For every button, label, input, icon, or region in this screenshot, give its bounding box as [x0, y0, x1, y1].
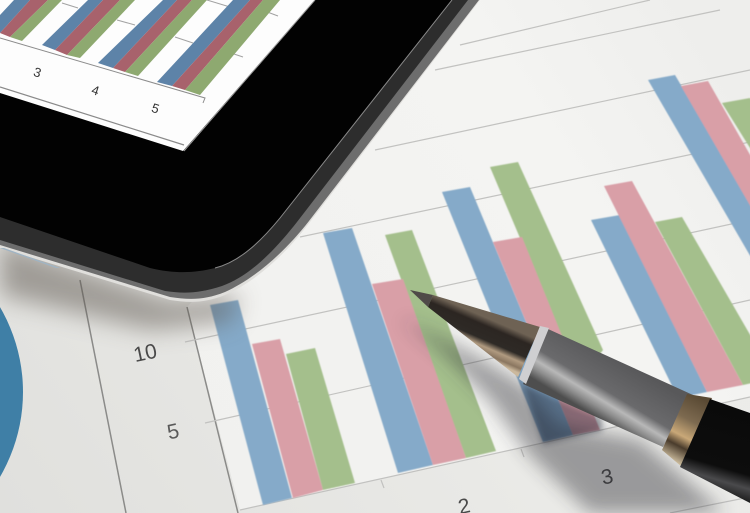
screen bars group 2	[0, 0, 62, 41]
bar group 2	[323, 228, 496, 473]
screen bars group 3	[42, 0, 135, 58]
pen silver collar	[519, 326, 549, 384]
screen label: 3: 3	[32, 64, 43, 81]
pen tip	[410, 290, 433, 307]
chart sheet	[0, 0, 315, 151]
pen contact shadow on bars	[523, 384, 602, 444]
bar group 5	[648, 75, 750, 290]
tablet shadow on paper	[0, 240, 240, 330]
screen bars group 5	[157, 0, 280, 95]
screen axis	[0, 38, 205, 103]
paper chart grid lines	[185, 0, 750, 513]
pen	[410, 290, 750, 503]
pen black barrel	[680, 399, 750, 503]
bar group 4	[591, 181, 750, 398]
screen label: 4: 4	[90, 82, 101, 99]
paper frame lines	[80, 280, 238, 513]
label: 5: 5	[165, 419, 181, 444]
screen bars group 4	[98, 0, 207, 76]
pen cone	[428, 295, 540, 377]
pen gold ring	[662, 394, 712, 467]
axis labels on paper	[131, 340, 615, 513]
tablet screen rim highlight	[215, 0, 452, 268]
paper bar chart	[210, 75, 750, 505]
pen shadow on paper	[400, 318, 725, 513]
pen grey barrel	[523, 329, 693, 447]
bar group 3	[442, 162, 603, 442]
screen axis labels	[32, 64, 161, 117]
label: 10: 10	[131, 340, 159, 367]
label: 3: 3	[599, 465, 615, 490]
chart plot area	[187, 0, 750, 510]
tablet bezel band	[0, 0, 468, 293]
pie chart fragment	[0, 224, 23, 513]
bar group 1	[210, 300, 355, 505]
tablet	[0, 0, 480, 302]
screen grid lines	[62, 0, 278, 57]
tablet reflection strip	[0, 248, 60, 268]
screen label: 5: 5	[150, 100, 161, 117]
tablet screen chart	[0, 0, 315, 151]
tablet screen bezel	[0, 0, 452, 272]
tablet outer edge	[0, 0, 480, 302]
